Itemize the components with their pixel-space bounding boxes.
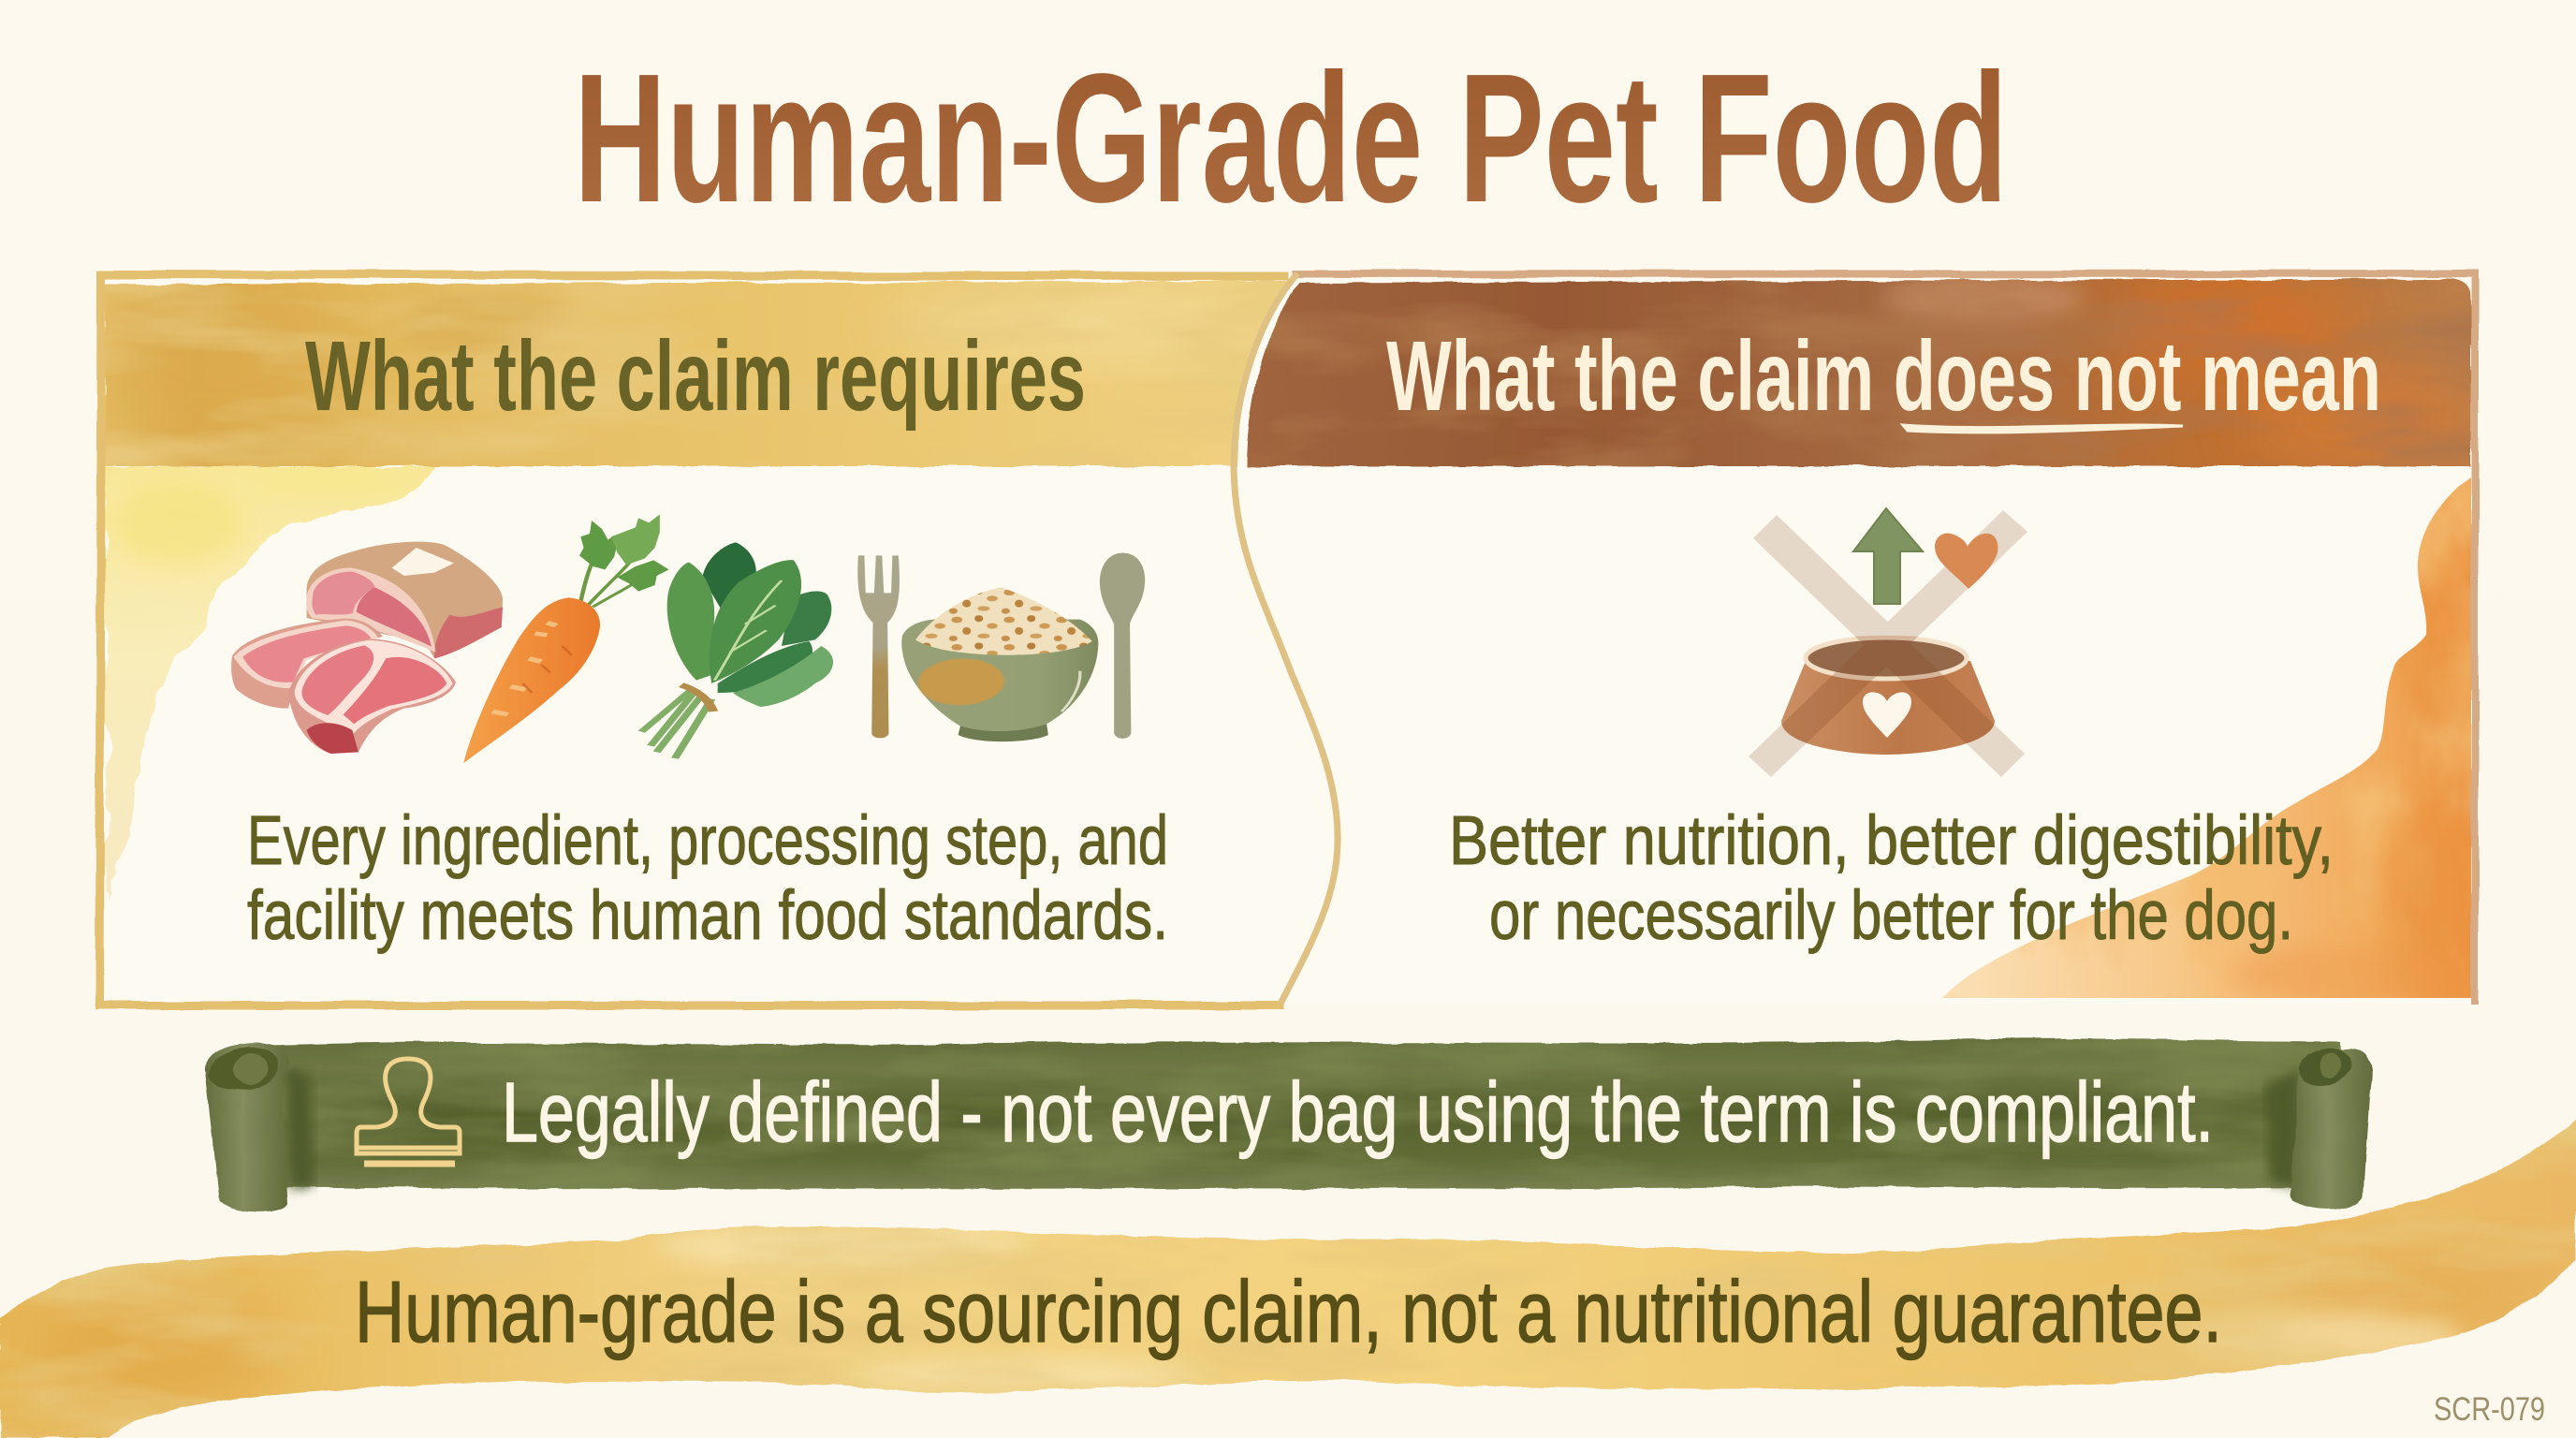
left scroll roll [205,1042,315,1211]
reference code: SCR-079 [2434,1391,2545,1428]
icon: up arrow [1853,508,1923,604]
icon: meat [231,542,503,754]
underline [1903,425,2183,433]
icon: carrot [463,514,669,763]
icon: fork [857,555,900,738]
text block: left panel body: facility meets human food standards. [247,876,1168,954]
x mark strokes [1749,510,2027,777]
panel: gold frame [99,274,1288,1005]
icon: stamp [357,1059,460,1164]
icon: bowl [1781,635,1995,755]
text block: left panel body: Every ingredient, processing step, and [247,801,1168,879]
ribbon: bottom takeaway [0,1105,2576,1438]
panel: brown frame [1292,273,2475,1004]
panel: comparison frame [94,273,2490,1005]
panel: left watercolor wash [105,466,443,899]
icon group: food ingredients [231,514,1145,763]
text block: right panel body [1449,801,2334,954]
curved divider [1234,273,1338,1004]
icon: spoon [1100,553,1145,739]
icon: bowl of grain [901,587,1098,741]
panel background [99,275,2475,1004]
text block: right panel body: or necessarily better for the dog. [1489,876,2293,954]
title: Human-Grade Pet Food [574,36,2008,241]
icon: heart [1935,534,1998,589]
banner: green scroll [205,1038,2372,1211]
heading: what the claim requires: What the claim requires [305,321,1086,432]
scroll body [234,1038,2340,1189]
panel: right orange wash [1928,473,2490,1002]
ribbon wash [0,1105,2576,1438]
right scroll roll [2265,1048,2372,1210]
panel: left header band [94,281,1301,468]
icon: spinach [641,542,833,758]
text block: right panel body: Better nutrition, better digestibility, [1449,801,2334,879]
panel: brown bottom edge [1282,1000,2477,1007]
icon: crossed-out dog bowl [1749,508,2027,777]
text block: left panel body [247,801,1168,954]
panel: right header band [1245,273,2475,468]
